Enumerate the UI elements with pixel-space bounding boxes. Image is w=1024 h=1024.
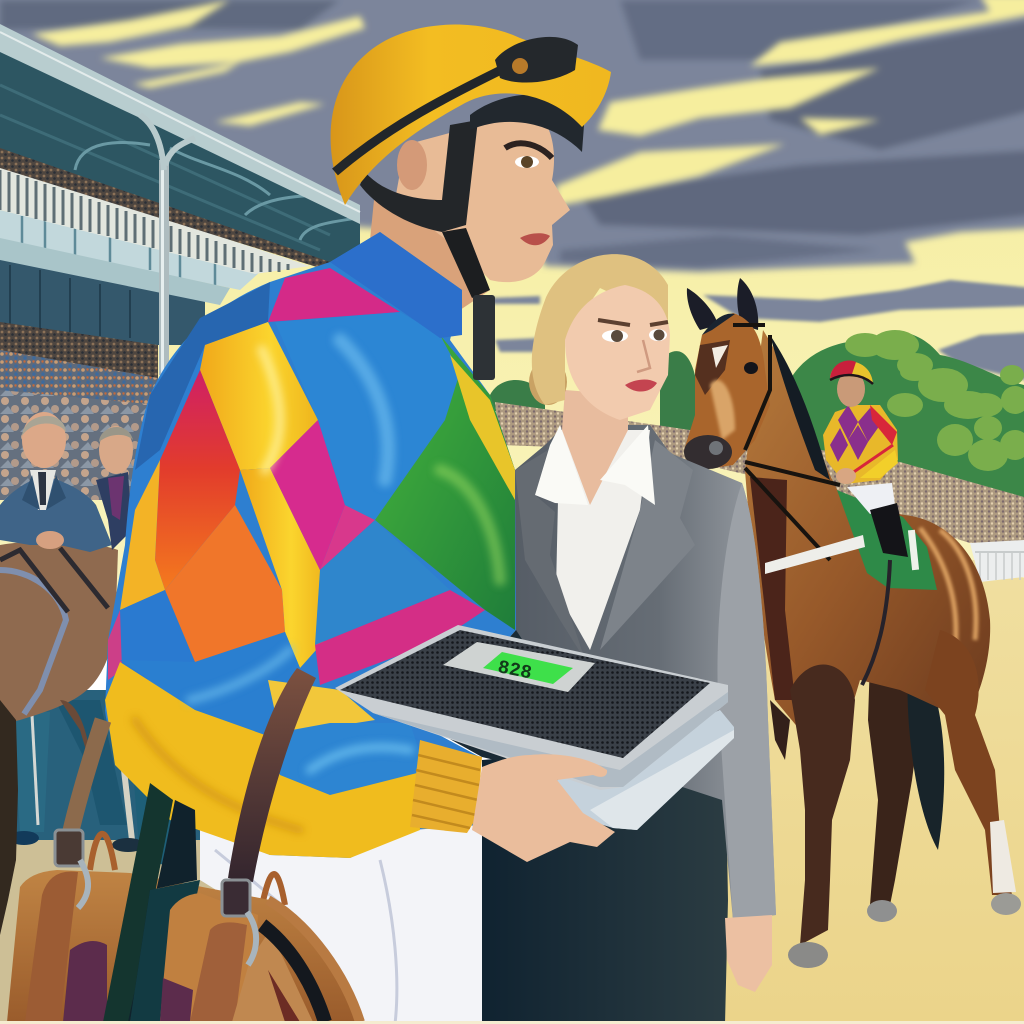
grandstand: lower wall [0, 258, 205, 345]
scale: textured mat [340, 630, 710, 758]
horse: far legs [868, 660, 925, 905]
woman: lapels [515, 450, 585, 660]
grandstand: roof edge [0, 24, 360, 224]
horse: ears [687, 278, 758, 330]
jockey: chin harness [360, 120, 478, 232]
main jockey [105, 25, 611, 1024]
grandstand: beam [0, 238, 230, 305]
horse: hind leg [925, 630, 1012, 895]
bag: shoulder strap [228, 668, 316, 882]
bag: outer body [7, 870, 362, 1022]
woman: hair [532, 254, 668, 405]
grandstand [0, 24, 360, 375]
distant jockey [823, 361, 908, 557]
jockey: collar [330, 232, 462, 338]
jockey: trousers [200, 825, 482, 1024]
jockey: face [395, 110, 570, 282]
trees [490, 330, 1024, 500]
left horse [0, 541, 118, 935]
scale: upper body [335, 625, 728, 790]
ground and legs behind the main jockey, left side [0, 690, 215, 1024]
woman: blazer [515, 425, 776, 920]
woman: skirt [475, 740, 728, 1024]
bag: handle arches [90, 834, 285, 905]
sky background [0, 0, 1024, 620]
bag: tan right panel [160, 893, 258, 1022]
grandstand: support pole [140, 115, 195, 375]
jockey: goggle strap [335, 68, 505, 172]
bag: purple inset left [63, 941, 107, 1022]
bag: purple inset right [160, 978, 193, 1022]
scale: display panel [443, 642, 595, 692]
stadium crowd [0, 322, 158, 500]
distant jockey: helmet [830, 361, 873, 383]
clouds [0, 0, 1024, 382]
grandstand: roof underside [0, 50, 360, 268]
distant jockey: face [837, 371, 865, 407]
scale: display reading: 828 [496, 656, 534, 684]
horse: front leg [790, 665, 855, 945]
leather bag [7, 668, 362, 1022]
woman: bun [529, 359, 567, 405]
white rail [970, 540, 1024, 582]
jockey: colour panels [105, 268, 515, 858]
racehorse [684, 278, 1021, 968]
grandstand: railing [0, 165, 310, 274]
jockey: cuff [410, 740, 482, 833]
bag: right end panel [232, 930, 313, 1022]
scale: lower plate [557, 710, 734, 830]
bag: right buckle [222, 880, 256, 965]
horse: saddle cloth [837, 490, 937, 590]
jockey: silks base [105, 232, 516, 858]
second spectator [96, 426, 133, 550]
woman: face [565, 285, 670, 420]
cloud gaps: yellow sky streaks [32, 0, 1024, 206]
bag: end curve [268, 900, 360, 1022]
grandstand: upper crowd [0, 148, 330, 268]
woman: collar [535, 425, 655, 505]
jockey: neck [370, 190, 490, 310]
jockey: visor [470, 94, 585, 152]
distant jockey: breeches [847, 483, 895, 514]
horse: mane [770, 335, 830, 480]
horse: head [684, 313, 770, 470]
bag: black strap [103, 783, 173, 1022]
jockey: helmet [331, 25, 611, 205]
bag: left buckle [55, 830, 88, 908]
weighing scale [335, 625, 734, 830]
jockey: satin highlights [135, 340, 500, 830]
bag: side strap [70, 720, 103, 835]
distant jockey: silks [823, 405, 898, 484]
man in blue suit [0, 412, 112, 552]
woman [475, 254, 776, 1024]
horse: girth [765, 535, 865, 574]
woman: hand [725, 915, 772, 992]
woman: neck [562, 390, 628, 505]
crowd bank [495, 402, 1024, 543]
scale: display reading [483, 652, 573, 684]
horse: tail [907, 650, 944, 850]
sand track [700, 560, 1024, 1024]
shadow beneath scale [430, 630, 620, 790]
bag: right flap [190, 922, 247, 1022]
woman: shirt [556, 430, 650, 650]
bottom edge strip [0, 1021, 1024, 1024]
grandstand: glass band [0, 210, 260, 290]
horse: body [745, 330, 990, 730]
distant jockey: boot [870, 503, 908, 557]
bag: left flap [25, 871, 78, 1022]
jockey hand holding scale [472, 754, 615, 862]
